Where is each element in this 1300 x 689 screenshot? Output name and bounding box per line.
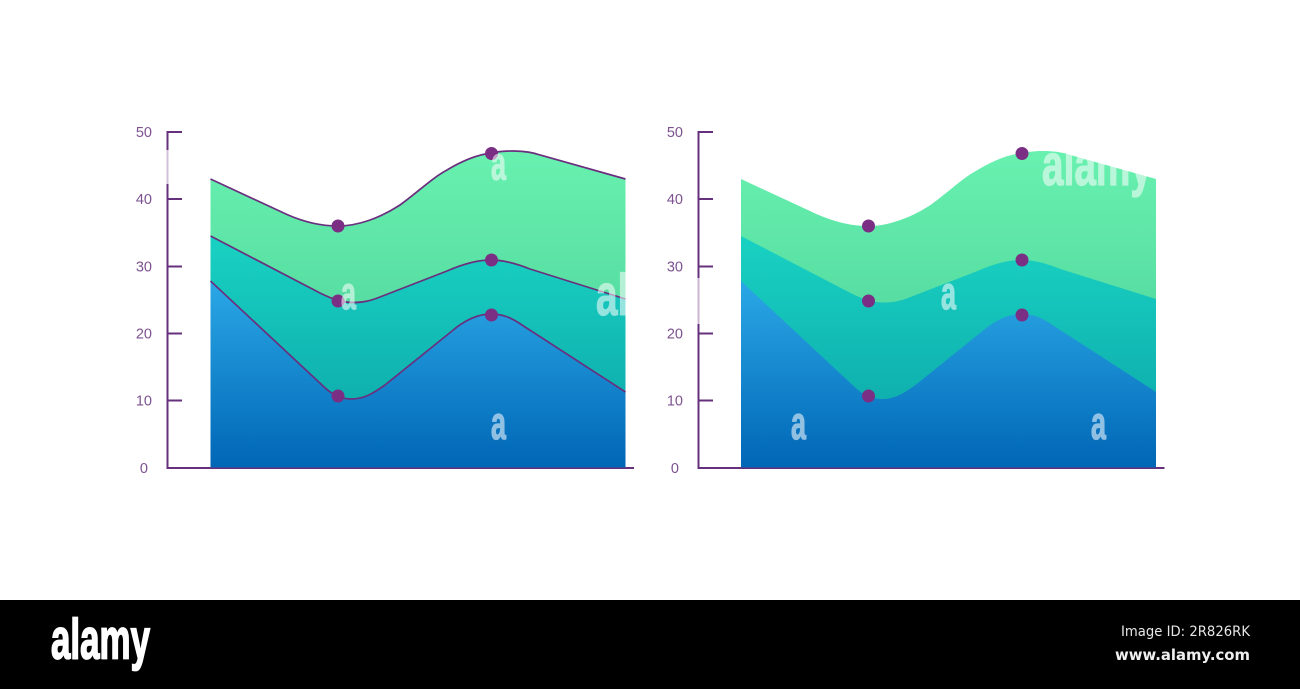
watermark overlays: alamy: [1042, 133, 1152, 198]
footer logo: alamy: [51, 608, 150, 672]
watermark overlays: a: [341, 267, 356, 319]
y axis right: [698, 132, 1164, 468]
website: www.alamy.com: [1115, 646, 1250, 664]
axis labels right: 20: [667, 326, 683, 342]
footer bar: [0, 600, 1300, 689]
data points left: [332, 147, 498, 402]
chart: left stacked area with lines: [136, 125, 634, 477]
watermark overlays: a: [491, 138, 506, 190]
axis labels left: 50: [136, 125, 152, 141]
axis labels right: 30: [667, 260, 683, 276]
watermark overlays: a: [791, 397, 806, 449]
axis labels left: 40: [136, 192, 152, 208]
areas right: [741, 151, 1156, 468]
axis labels right: 40: [667, 192, 683, 208]
watermark overlays: [166, 133, 1152, 449]
watermark overlays: a: [491, 397, 506, 449]
axis labels right: 10: [667, 394, 683, 410]
axis labels right: 50: [667, 125, 683, 141]
blue area left: [210, 281, 626, 468]
watermark overlays: a: [941, 267, 956, 319]
image id: Image ID: 2R826RK: [1121, 624, 1251, 640]
axis labels left: 20: [136, 326, 152, 342]
axis labels right: 0: [671, 461, 679, 477]
axis labels left: 10: [136, 394, 152, 410]
axis labels right: [667, 125, 683, 477]
axis labels left: [136, 125, 152, 477]
green area left: [210, 151, 626, 320]
chart: right stacked area without lines: [667, 125, 1164, 477]
teal area left: [210, 236, 626, 410]
series lines left: [210, 151, 626, 399]
data points right: [862, 147, 1028, 402]
y axis left: [168, 132, 634, 468]
axis labels left: 30: [136, 260, 152, 276]
watermark overlays: alamy: [596, 263, 706, 328]
axis labels left: 0: [140, 461, 148, 477]
watermark overlays: a: [1091, 397, 1106, 449]
